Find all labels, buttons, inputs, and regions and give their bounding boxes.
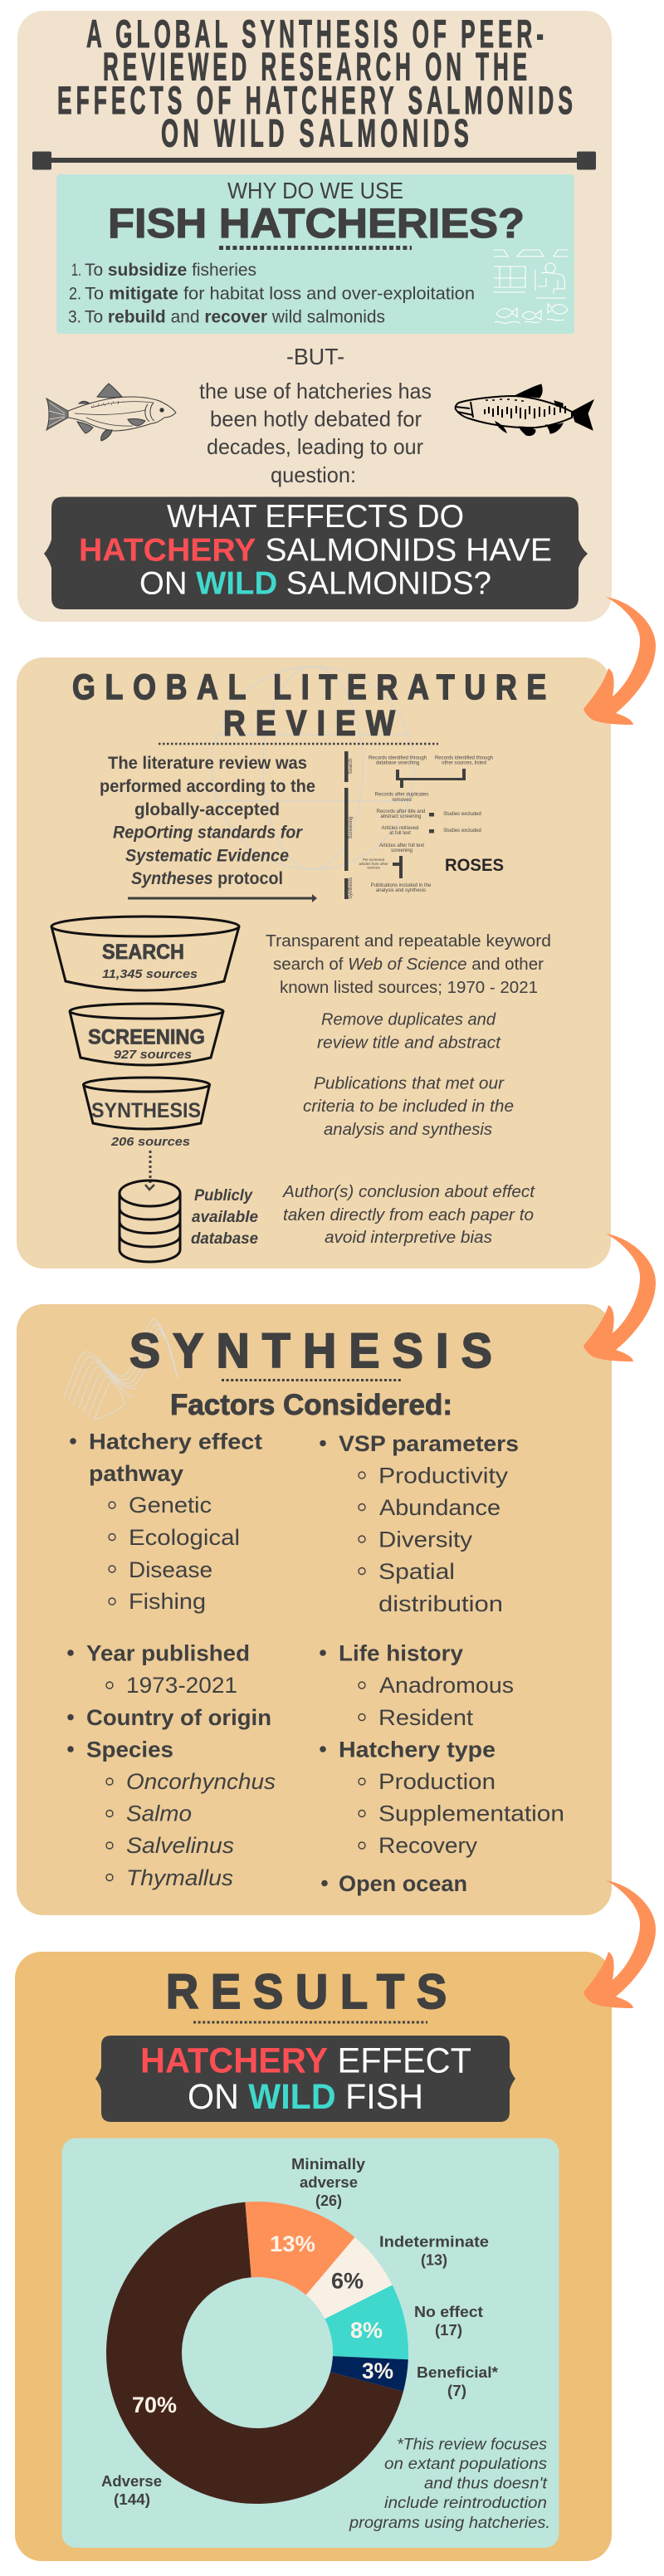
chart: ROSES flow diagram: Articles after full text — [379, 843, 424, 848]
list: left column — [67, 1430, 276, 1890]
callout: research question — [44, 496, 588, 609]
heading: GLOBAL LITERATURE — [72, 667, 556, 707]
reasons list — [68, 261, 475, 327]
list: left column: Fishing — [129, 1589, 206, 1614]
text: review protocol: globally-accepted — [134, 800, 280, 819]
decorative wave ribbon — [64, 1318, 178, 1420]
funnel: search: SEARCH — [102, 941, 184, 964]
text: synthesis description: criteria to be included in the — [303, 1097, 514, 1116]
donut chart: 6% — [331, 2268, 364, 2293]
chart: ROSES flow diagram: Pre screened — [363, 858, 385, 862]
reasons list: 3. — [68, 307, 81, 327]
list: right column: VSP parameters — [339, 1431, 519, 1456]
chart labels: Minimally — [291, 2156, 365, 2173]
dotted arrow to database — [145, 1151, 154, 1190]
panel: results — [15, 1952, 612, 2561]
arrow: synthesis to results — [583, 1880, 656, 2008]
donut chart: 8% — [350, 2318, 383, 2343]
chart: ROSES flow diagram: Records after title and — [377, 809, 425, 814]
list: left column: Disease — [129, 1557, 212, 1582]
dotted underline — [193, 2021, 427, 2024]
chart: ROSES flow diagram: Records after duplicates — [375, 793, 428, 798]
text: search description — [266, 932, 551, 997]
funnel: search: 11,345 sources — [102, 967, 198, 981]
chart labels: Indeterminate — [379, 2234, 489, 2251]
panel: chart background — [61, 2139, 559, 2548]
chart labels: No effect — [414, 2304, 483, 2320]
footnote: include reintroduction — [384, 2495, 547, 2512]
list: right column: Supplementation — [378, 1801, 564, 1826]
reasons list: To rebuild and recover wild salmonids — [85, 307, 385, 327]
chart labels: Beneficial* — [417, 2364, 498, 2381]
text: conclusion description: Author(s) conclusion about effect — [282, 1183, 535, 1201]
list: right column: Diversity — [378, 1528, 473, 1552]
list: right column: Productivity — [378, 1463, 509, 1488]
chart: ROSES flow diagram: Studies excluded — [443, 812, 481, 817]
text: conclusion description: avoid interpretive bias — [325, 1229, 492, 1247]
subheading: Factors Considered: — [170, 1389, 452, 1421]
footnote: on extant populations — [384, 2456, 548, 2473]
text: screening description: Remove duplicates and — [321, 1011, 496, 1029]
text: review protocol: The literature review was — [108, 754, 307, 773]
arrow: literature review to synthesis — [583, 1234, 656, 1361]
chart labels: Adverse — [101, 2473, 162, 2490]
callout: research question: WHAT EFFECTS DO — [167, 499, 464, 535]
chart: ROSES flow diagram: Studies excluded — [443, 829, 481, 833]
chart: ROSES flow diagram: analysis and synthesis — [376, 888, 426, 893]
footnote: programs using hatcheries. — [349, 2515, 550, 2532]
text: search description: known listed sources; 1970 - 2021 — [280, 979, 538, 997]
icon: hatchery salmon illustration — [46, 384, 176, 441]
chart: ROSES flow diagram: screening — [391, 848, 413, 853]
decorative faint globe — [212, 667, 414, 869]
text: synthesis description: Publications that met our — [314, 1074, 505, 1092]
list: right column — [320, 1431, 564, 1896]
panel: introduction — [17, 11, 612, 622]
funnel: screening — [70, 1004, 223, 1065]
chart: ROSES flow diagram: Articles retrieved — [382, 826, 418, 831]
text: search description: Transparent and repeatable keyword — [266, 932, 551, 951]
list: right column: Life history — [339, 1641, 463, 1666]
list: left column: Salmo — [126, 1801, 192, 1826]
list: right column: Resident — [378, 1705, 474, 1730]
list: left column: Thymallus — [126, 1865, 233, 1890]
chart labels: (26) — [315, 2192, 342, 2209]
callout: research question: HATCHERY SALMONIDS HAVE — [79, 533, 552, 569]
list: right column: Anadromous — [379, 1673, 514, 1698]
panel: global literature review — [17, 657, 611, 1268]
list: left column: Year published — [86, 1641, 250, 1666]
label: public database: Publicly — [194, 1187, 253, 1205]
text: search description: search of Web of Science and other — [273, 956, 544, 974]
dotted underline — [219, 246, 412, 250]
list: right column: distribution — [378, 1591, 503, 1616]
chart labels: adverse — [300, 2174, 358, 2191]
icon: wild salmon illustration — [456, 384, 593, 436]
heading: REVIEW — [223, 704, 405, 744]
list: right column: Open ocean — [339, 1871, 467, 1896]
text: hotly debated: been hotly debated for — [210, 406, 422, 431]
text: hotly debated — [199, 379, 432, 487]
heading: fish hatcheries: FISH HATCHERIES? — [108, 200, 525, 247]
funnel: synthesis — [83, 1078, 209, 1149]
text: hotly debated: question: — [271, 462, 356, 487]
chart labels: (7) — [447, 2383, 466, 2399]
text: review protocol — [100, 754, 315, 888]
list: left column: Country of origin — [86, 1705, 271, 1730]
chart: ROSES flow diagram: Synthesis — [349, 877, 354, 899]
chart: ROSES flow diagram — [344, 751, 504, 899]
funnel: screening: 927 sources — [114, 1048, 192, 1062]
list: left column: Species — [86, 1737, 173, 1762]
heading: RESULTS — [166, 1965, 459, 2019]
footnote — [349, 2436, 550, 2532]
text: synthesis description: analysis and synthesis — [324, 1121, 492, 1139]
text: screening description: review title and abstract — [317, 1034, 502, 1053]
panel: synthesis — [17, 1304, 612, 1915]
chart labels: (144) — [114, 2491, 150, 2508]
footnote: and thus doesn't — [424, 2476, 548, 2493]
dotted underline — [222, 1379, 401, 1381]
chart: ROSES flow diagram: ROSES — [445, 856, 504, 875]
title — [57, 12, 577, 155]
chart: ROSES flow diagram: articles from other — [359, 862, 388, 866]
reasons list: To subsidize fisheries — [85, 261, 256, 280]
chart: ROSES flow diagram: removed — [392, 798, 412, 803]
heading — [72, 667, 556, 744]
label: public database: database — [191, 1230, 258, 1248]
list: left column: Hatchery effect — [89, 1430, 262, 1454]
list: right column: Abundance — [379, 1495, 500, 1520]
text: hotly debated: the use of hatcheries has — [199, 379, 432, 403]
arrow to ROSES diagram — [128, 894, 317, 902]
icon: database — [120, 1180, 180, 1262]
list: right column: Hatchery type — [339, 1737, 496, 1762]
funnel: synthesis: SYNTHESIS — [91, 1099, 201, 1122]
text: but: -BUT- — [286, 344, 344, 369]
funnel: search — [51, 917, 239, 990]
chart: ROSES flow diagram: abstract screening — [380, 814, 422, 819]
text: conclusion description — [282, 1183, 535, 1247]
chart: ROSES flow diagram: Screening — [349, 816, 354, 839]
text: conclusion description: taken directly from each paper to — [283, 1206, 534, 1224]
panel: why hatcheries — [56, 174, 574, 334]
chart: ROSES flow diagram: other sources, listed — [442, 761, 486, 766]
callout: research question: ON WILD SALMONIDS? — [139, 565, 491, 601]
icon: hatchery facility — [493, 250, 568, 323]
chart labels: (17) — [435, 2322, 462, 2339]
chart: ROSES flow diagram: Publications included in the — [371, 883, 432, 888]
list: right column: Spatial — [378, 1559, 455, 1584]
list: left column: pathway — [89, 1461, 183, 1486]
list: left column: Ecological — [129, 1525, 240, 1550]
label: public database: available — [192, 1209, 258, 1226]
chart: ROSES flow diagram: Search — [349, 758, 354, 775]
label: public database — [191, 1187, 258, 1248]
funnel: synthesis: 206 sources — [110, 1135, 190, 1149]
text: synthesis description — [303, 1074, 514, 1139]
chart: ROSES flow diagram: sources — [367, 866, 380, 870]
chart: ROSES flow diagram: database searching — [376, 761, 419, 766]
reasons list: 1. — [71, 261, 81, 280]
list: left column: Oncorhynchus — [126, 1769, 276, 1794]
funnel: screening: SCREENING — [88, 1026, 205, 1049]
text: review protocol: performed according to the — [100, 777, 315, 796]
text: review protocol: Syntheses protocol — [131, 869, 283, 888]
footnote: *This review focuses — [397, 2436, 548, 2454]
text: hotly debated: decades, leading to our — [207, 434, 423, 459]
callout: hatchery effect on wild fish — [95, 2036, 515, 2122]
reasons list: 2. — [69, 285, 81, 304]
list: right column: Production — [378, 1769, 496, 1794]
donut chart: 70% — [132, 2393, 177, 2417]
donut chart — [106, 2202, 408, 2504]
list: left column: 1973-2021 — [126, 1673, 237, 1698]
list: right column: Recovery — [378, 1833, 478, 1858]
heading: why do we use: WHY DO WE USE — [227, 178, 403, 203]
divider bar — [32, 151, 596, 169]
chart: ROSES flow diagram: at full text — [389, 831, 411, 836]
chart: ROSES flow diagram: Records identified through — [435, 756, 493, 761]
list: left column: Salvelinus — [126, 1833, 234, 1858]
text: review protocol: RepOrting standards for — [113, 824, 304, 842]
reasons list: To mitigate for habitat loss and over-exploitation — [85, 285, 475, 304]
donut chart: 13% — [270, 2231, 315, 2256]
chart labels — [101, 2156, 498, 2508]
chart: ROSES flow diagram: Records identified through — [369, 756, 427, 761]
callout: hatchery effect on wild fish: HATCHERY EFFECT — [140, 2041, 471, 2080]
list: left column: Genetic — [129, 1493, 212, 1518]
text: screening description — [317, 1011, 502, 1053]
arrow: introduction to literature review — [583, 597, 656, 725]
callout: hatchery effect on wild fish: ON WILD FISH — [188, 2077, 423, 2117]
chart labels: (13) — [421, 2252, 447, 2269]
dotted underline — [159, 743, 438, 745]
heading: SYNTHESIS — [129, 1324, 505, 1378]
donut chart: 3% — [362, 2358, 393, 2383]
text: review protocol: Systematic Evidence — [125, 847, 289, 865]
